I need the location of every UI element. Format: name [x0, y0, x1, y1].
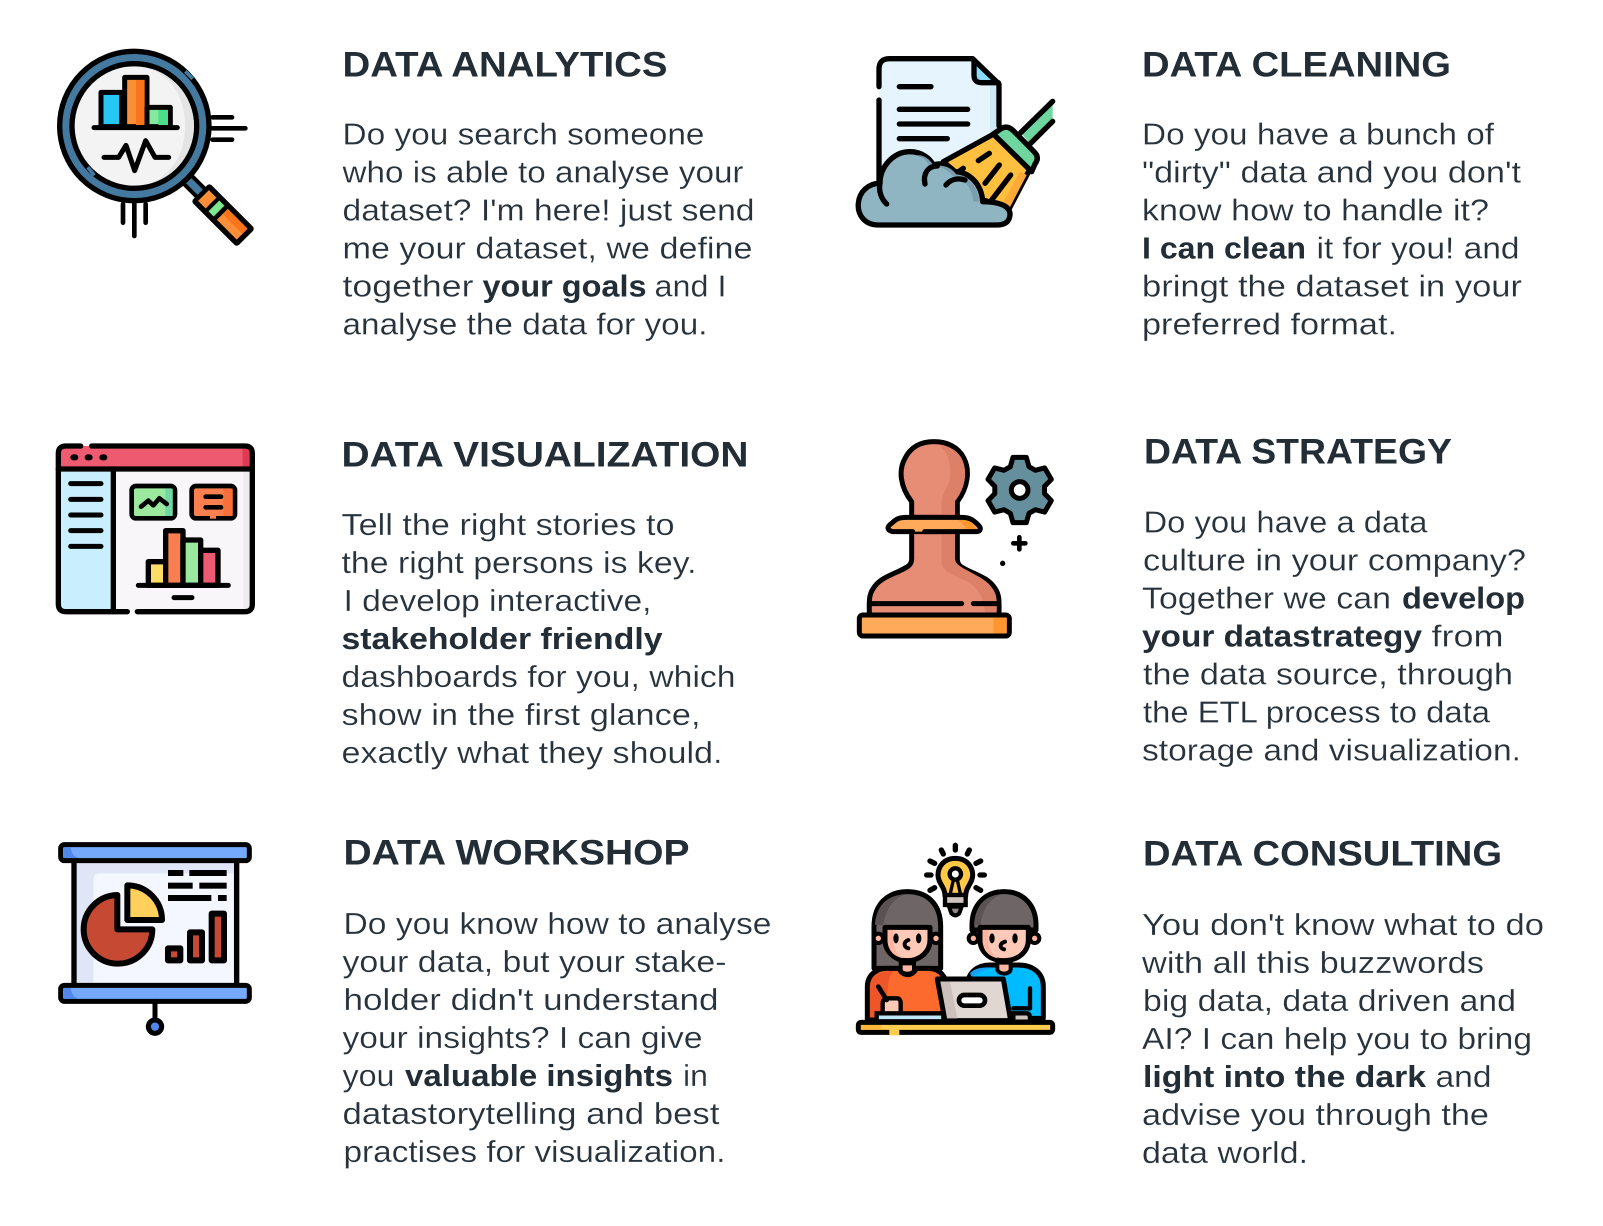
body text: Tell the right stories to: [342, 507, 674, 542]
body text: Do you have a bunch of: [1142, 117, 1494, 152]
panel: data workshop: [61, 833, 772, 1169]
heading: DATA ANALYTICS: [342, 45, 668, 84]
icon: magnifying glass over charts: [60, 51, 254, 246]
body text: Do you know how to analyse: [344, 906, 772, 941]
panel: data consulting: [858, 834, 1544, 1170]
body text: [342, 507, 736, 770]
body text: and: [1436, 1059, 1492, 1094]
body text: [1142, 505, 1526, 768]
body text: know how to handle it?: [1142, 193, 1489, 228]
left person: [874, 892, 941, 968]
icon: dashboard window: [58, 446, 252, 612]
body text: practises for visualization.: [344, 1134, 726, 1169]
body text: show in the first glance,: [342, 697, 700, 732]
body text: advise you through the: [1142, 1097, 1489, 1132]
panel: data visualization: [58, 435, 749, 770]
body text: datastorytelling and best: [342, 1096, 720, 1131]
heading: DATA CLEANING: [1142, 45, 1451, 84]
body text: the right persons is key.: [342, 545, 696, 580]
body text: light into the dark: [1143, 1059, 1427, 1094]
body text: storage and visualization.: [1142, 733, 1521, 768]
broom: [1021, 103, 1053, 144]
body text: bringt the dataset in your: [1142, 269, 1522, 304]
laptop: [937, 979, 1011, 1021]
body text: valuable insights: [405, 1058, 673, 1093]
body text: the ETL process to data: [1143, 695, 1491, 730]
body text: AI? I can help you to bring: [1142, 1021, 1532, 1056]
body text: I can clean: [1142, 231, 1306, 266]
icon: projector screen with charts: [61, 845, 249, 1033]
cloud: [858, 152, 1010, 225]
icon: two people, laptop and light bulb: [858, 845, 1053, 1035]
body text: data world.: [1142, 1135, 1308, 1170]
body text: [341, 117, 754, 342]
body text: with all this buzzwords: [1141, 945, 1484, 980]
body text: develop: [1402, 581, 1525, 616]
body text: your data, but your stake-: [342, 944, 726, 979]
body text: your insights? I can give: [342, 1020, 702, 1055]
body text: from: [1432, 619, 1504, 654]
body text: analyse the data for you.: [342, 307, 708, 342]
body text: culture in your company?: [1143, 543, 1526, 578]
body text: and I: [654, 269, 726, 304]
body text: together: [342, 269, 474, 304]
body text: big data, data driven and: [1143, 983, 1516, 1018]
hand and paper: [883, 998, 901, 1017]
body text: dashboards for you, which: [342, 659, 736, 694]
body text: your datastrategy: [1142, 619, 1423, 654]
body text: who is able to analyse your: [341, 155, 744, 190]
body text: exactly what they should.: [342, 735, 722, 770]
body text: the data source, through: [1143, 657, 1513, 692]
body text: preferred format.: [1142, 307, 1397, 342]
body text: "dirty" data and you don't: [1142, 155, 1521, 190]
heading: DATA WORKSHOP: [344, 833, 690, 872]
body text: holder didn't understand: [344, 982, 718, 1017]
body text: Do you search someone: [342, 117, 704, 152]
heading: DATA CONSULTING: [1143, 834, 1502, 873]
body text: Together we can: [1142, 581, 1391, 616]
body text: Do you have a data: [1144, 505, 1428, 540]
table: [858, 1022, 1053, 1032]
icon: pawn and gear: [859, 442, 1051, 636]
body text: You don't know what to do: [1142, 907, 1544, 942]
panel: data analytics: [60, 45, 755, 342]
light bulb: [927, 845, 984, 915]
icon: document, broom and dust cloud: [858, 59, 1053, 225]
heading: DATA STRATEGY: [1144, 432, 1452, 471]
handle: [175, 167, 254, 246]
body text: it for you! and: [1316, 231, 1520, 266]
body text: [1142, 117, 1522, 342]
body text: [1141, 907, 1544, 1170]
body text: [342, 906, 772, 1169]
right person: [967, 965, 1043, 1018]
body text: me your dataset, we define: [342, 231, 752, 266]
panel: data strategy: [859, 432, 1526, 768]
body text: in: [683, 1058, 708, 1093]
body text: stakeholder friendly: [342, 621, 663, 656]
panel: data cleaning: [858, 45, 1522, 342]
body text: you: [342, 1058, 394, 1093]
body text: I develop interactive,: [344, 583, 652, 618]
body text: your goals: [482, 269, 646, 304]
heading: DATA VISUALIZATION: [342, 435, 748, 474]
body text: dataset? I'm here! just send: [342, 193, 754, 228]
